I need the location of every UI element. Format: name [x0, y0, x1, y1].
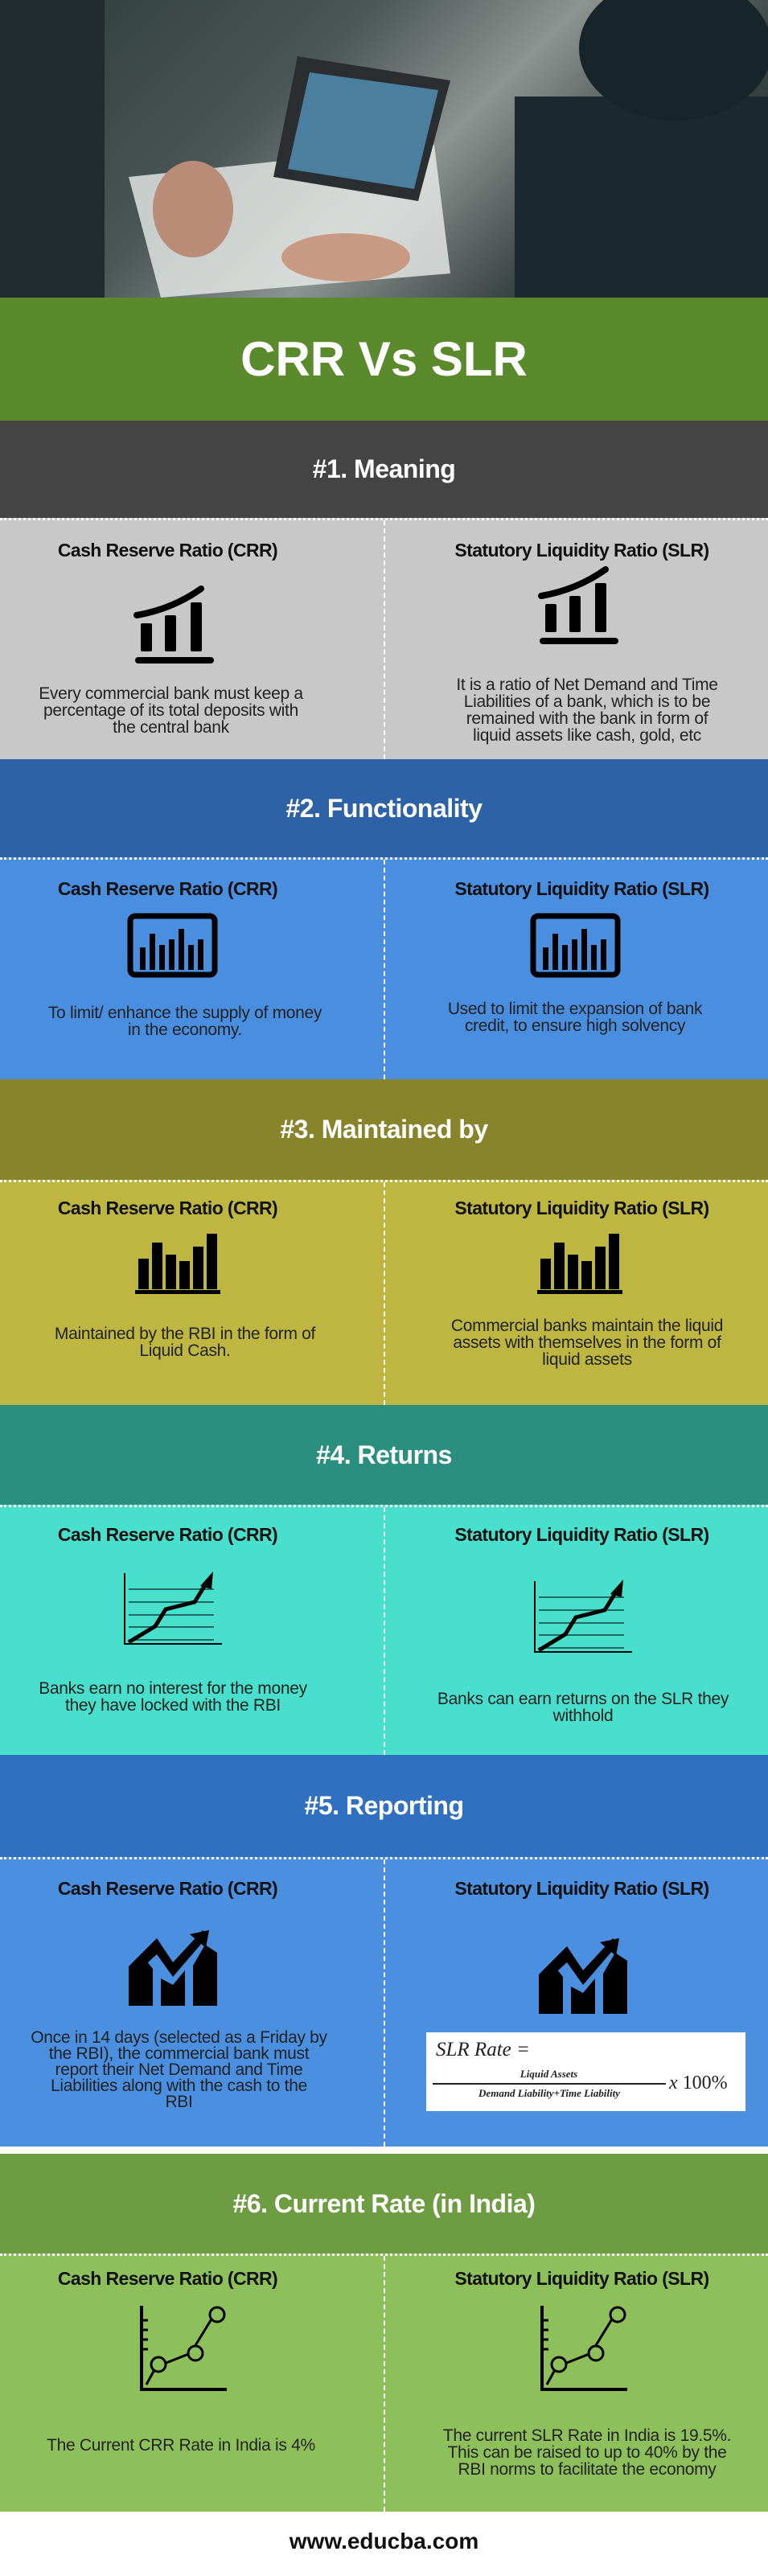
text: SLR maintained: assets with themselves in the form of	[453, 1333, 721, 1352]
section 1 header: #1. Meaning	[313, 454, 455, 483]
text: SLR functionality: credit, to ensure high solvency	[465, 1017, 685, 1035]
text: SLR meaning	[456, 676, 718, 745]
text: CRR reporting: the RBI), the commercial bank must	[49, 2044, 309, 2063]
heading: CRR: Cash Reserve Ratio (CRR)	[58, 1878, 277, 1899]
text: CRR reporting: report their Net Demand and Time	[55, 2060, 302, 2079]
text: SLR maintained: liquid assets	[542, 1350, 632, 1369]
header photo	[0, 0, 768, 298]
text: CRR returns	[39, 1679, 307, 1715]
text: SLR functionality: Used to limit the expansion of bank	[448, 1000, 702, 1018]
text: CRR reporting: Liabilities along with the cash to the	[51, 2077, 307, 2095]
text: SLR returns	[437, 1690, 729, 1725]
section 3 header	[0, 1079, 768, 1180]
text: SLR functionality	[448, 1000, 703, 1035]
text: SLR current rate: The current SLR Rate in India is 19.5%.	[443, 2426, 731, 2445]
heading: SLR: Statutory Liquidity Ratio (SLR)	[454, 1524, 709, 1545]
text: CRR reporting	[31, 2028, 327, 2111]
icon: line chart SLR	[534, 1580, 632, 1653]
formula box: SLR rate	[426, 2032, 745, 2111]
formula box: SLR rate: x 100%	[669, 2073, 728, 2093]
text: CRR reporting: RBI	[165, 2093, 193, 2111]
section 1 header	[0, 421, 768, 518]
text: SLR meaning: Liabilities of a bank, which is to be	[464, 692, 710, 711]
text: CRR meaning: the central bank	[113, 718, 229, 737]
icon: growth bars arrow SLR	[539, 1938, 627, 2014]
text: SLR returns: withhold	[553, 1707, 613, 1725]
text: CRR functionality: To limit/ enhance the supply of money	[48, 1004, 322, 1022]
icon: framed bar chart CRR	[127, 914, 217, 978]
section 5 header	[0, 1755, 768, 1857]
section 2 header	[0, 759, 768, 857]
title	[0, 298, 768, 421]
section 3 header: #3. Maintained by	[280, 1115, 488, 1144]
icon: dot line chart CRR	[140, 2306, 227, 2391]
text: SLR maintained	[451, 1317, 723, 1369]
heading: SLR: Statutory Liquidity Ratio (SLR)	[454, 878, 709, 899]
panel: current rate	[0, 2253, 768, 2512]
text: CRR maintained	[55, 1325, 315, 1360]
text: SLR current rate	[443, 2426, 731, 2479]
icon: bar chart growth SLR	[538, 566, 618, 644]
heading: CRR: Cash Reserve Ratio (CRR)	[58, 2268, 277, 2289]
heading: CRR: Cash Reserve Ratio (CRR)	[58, 1524, 277, 1545]
title: CRR Vs SLR	[240, 332, 528, 386]
section 5 header: #5. Reporting	[305, 1791, 463, 1820]
text: SLR current rate: RBI norms to facilitate the economy	[458, 2460, 716, 2479]
icon: growth bars arrow CRR	[129, 1930, 217, 2006]
text: CRR maintained: Maintained by the RBI in the form of	[55, 1325, 315, 1343]
footer: website: www.educba.com	[290, 2529, 478, 2553]
heading: SLR: Statutory Liquidity Ratio (SLR)	[454, 2268, 709, 2289]
text: CRR meaning: Every commercial bank must keep a	[39, 684, 303, 703]
icon: bar chart SLR	[537, 1234, 622, 1294]
formula box: SLR rate: SLR Rate =	[436, 2039, 530, 2060]
text: CRR functionality	[48, 1004, 322, 1039]
text: CRR returns: Banks earn no interest for the money	[39, 1679, 307, 1698]
panel: returns	[0, 1505, 768, 1755]
formula box: SLR rate: Demand Liability+Time Liability	[478, 2087, 620, 2099]
icon: line chart CRR	[124, 1571, 222, 1645]
icon: bar chart CRR	[135, 1234, 220, 1294]
text: CRR reporting: Once in 14 days (selected as a Friday by	[31, 2028, 327, 2047]
text: CRR returns: they have locked with the RBI	[65, 1696, 281, 1715]
heading: CRR: Cash Reserve Ratio (CRR)	[58, 878, 277, 899]
heading: SLR: Statutory Liquidity Ratio (SLR)	[454, 1198, 709, 1218]
icon: framed bar chart SLR	[531, 914, 621, 978]
text: SLR returns: Banks can earn returns on the SLR they	[437, 1690, 729, 1708]
text: SLR maintained: Commercial banks maintain the liquid	[451, 1317, 723, 1335]
panel: functionality	[0, 857, 768, 1079]
heading: SLR: Statutory Liquidity Ratio (SLR)	[454, 1878, 709, 1899]
heading: CRR: Cash Reserve Ratio (CRR)	[58, 1198, 277, 1218]
text: CRR meaning	[39, 684, 304, 737]
section 2 header: #2. Functionality	[286, 794, 482, 823]
text: SLR meaning: liquid assets like cash, gold, etc	[473, 726, 701, 745]
text: SLR meaning: remained with the bank in form of	[466, 709, 708, 728]
section 6 header: #6. Current Rate (in India)	[233, 2189, 535, 2218]
formula box: SLR rate: Liquid Assets	[520, 2068, 577, 2080]
section 4 header: #4. Returns	[316, 1440, 452, 1469]
panel: meaning	[0, 518, 768, 759]
icon: bar chart growth CRR	[133, 585, 214, 664]
text: CRR meaning: percentage of its total deposits with	[43, 701, 298, 720]
heading: CRR: Cash Reserve Ratio (CRR)	[58, 540, 277, 561]
icon: dot line chart SLR	[540, 2306, 627, 2391]
text: CRR maintained: Liquid Cash.	[139, 1341, 231, 1360]
text: CRR functionality: in the economy.	[128, 1021, 242, 1039]
panel: reporting	[0, 1857, 768, 2147]
section 4 header	[0, 1405, 768, 1505]
text: CRR current rate: The Current CRR Rate in India is 4%	[47, 2436, 315, 2455]
section 6 header	[0, 2154, 768, 2253]
text: SLR current rate: This can be raised to up to 40% by the	[447, 2443, 727, 2462]
heading: SLR: Statutory Liquidity Ratio (SLR)	[454, 540, 709, 561]
text: SLR meaning: It is a ratio of Net Demand and Time	[456, 676, 718, 694]
panel: maintained by	[0, 1180, 768, 1405]
